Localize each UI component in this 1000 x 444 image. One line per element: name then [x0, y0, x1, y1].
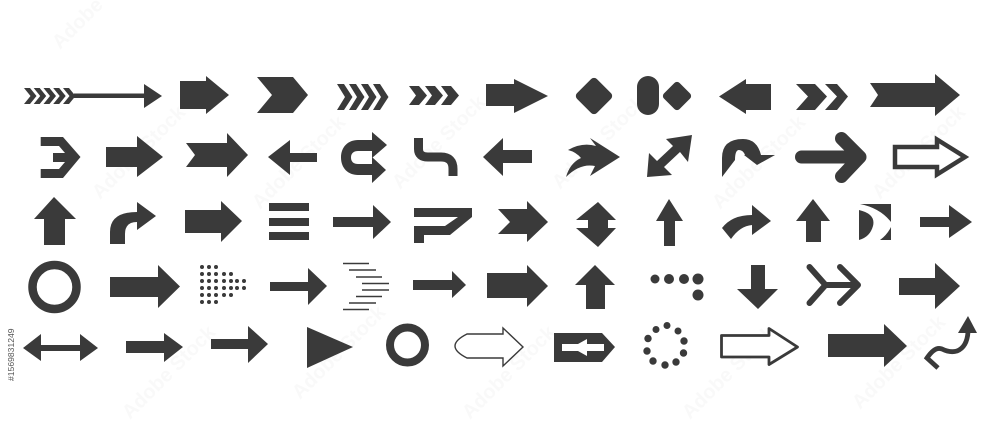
row 3: notched arrow — [498, 201, 548, 242]
row 3: right arrow — [920, 205, 972, 238]
watermark text: Adobe Stock — [248, 111, 351, 214]
row 4: down arrow — [737, 265, 778, 309]
row 3: up arrow — [796, 199, 830, 242]
row 4: up arrow — [575, 265, 615, 309]
row 2: notched arrow — [186, 133, 248, 177]
row 2: rounded arrow — [802, 138, 860, 176]
row 1: long notched arrow — [870, 74, 960, 116]
row 3: up arrow — [656, 199, 683, 246]
row 1: block arrow — [180, 76, 229, 114]
row 2: left arrow — [483, 138, 532, 176]
row 1: four chevrons — [337, 84, 388, 110]
row 3: up arrow — [34, 197, 76, 245]
row 3: curved arrow — [722, 205, 771, 239]
watermark text: Adobe Stock — [88, 101, 191, 204]
watermark text: Adobe Stock — [118, 321, 221, 424]
row 4: thin arrow — [413, 271, 466, 298]
row 5: horizontal double arrow — [23, 334, 98, 361]
row 4: block arrow — [487, 265, 548, 307]
row 1: rounded diamond — [574, 76, 614, 116]
row 3: vertical double arrow — [576, 202, 616, 247]
row 2: block arrow — [106, 136, 163, 177]
row 1: pill — [637, 76, 659, 115]
row 3: square swoosh — [859, 204, 891, 240]
row 5: right arrow — [211, 326, 268, 363]
row 5: large block arrow — [828, 324, 907, 367]
row 2: E shaped arrow — [41, 137, 80, 178]
row 4: speed lines arrow — [343, 264, 389, 310]
row 3: thin right arrow — [333, 205, 391, 239]
row 4: block arrow — [110, 265, 180, 308]
watermark text: Adobe Stock — [288, 301, 391, 404]
watermark text: Adobe Stock — [868, 101, 971, 204]
row 1: pointed arrow — [486, 79, 548, 113]
row 1: small rounded diamond — [661, 80, 693, 112]
row 5: thin outline arrow — [455, 328, 523, 366]
row 4: right arrow — [270, 268, 327, 305]
row 4: dotted corner arrow — [650, 274, 704, 300]
row 1: three chevrons — [409, 86, 459, 105]
row 1: left arrow — [719, 79, 771, 114]
row 5: squiggle arrow — [927, 316, 977, 368]
row 3: P shaped arrow — [414, 208, 472, 243]
stock id text: #1569831249 — [6, 328, 16, 381]
row 3: block arrow — [185, 201, 242, 242]
row 5: right arrow — [126, 333, 183, 362]
row 5: triangle — [307, 327, 353, 368]
row 1: large chevron — [257, 77, 308, 113]
row 4: dotted arrow — [200, 265, 246, 304]
row 3: curved right arrow — [110, 202, 156, 244]
watermark text: Adobe Stock — [388, 91, 491, 194]
row 5: tag with inner arrow — [554, 333, 615, 362]
row 1: double chevron — [796, 84, 848, 110]
watermark text: Adobe Stock — [848, 311, 951, 414]
row 5: outline arrow — [722, 328, 798, 364]
row 2: U-turn double arrow — [341, 132, 387, 183]
watermark text: Adobe Stock — [458, 321, 561, 424]
row 4: double round chevron — [810, 267, 858, 303]
row 2: curved U arrow — [722, 139, 775, 177]
row 2: outline arrow — [895, 140, 965, 174]
row 2: left arrow — [268, 140, 317, 175]
row 2: diagonal double arrow — [647, 135, 692, 177]
row 4: block arrow — [899, 263, 960, 309]
row 2: S-bend line — [418, 138, 453, 176]
watermark text: Adobe Stock — [678, 321, 781, 424]
row 3: three bars — [269, 203, 309, 240]
watermark text: Adobe Stock — [548, 91, 651, 194]
row 4: ring — [32, 265, 76, 309]
row 2: feathered arrow — [566, 138, 620, 177]
row 5: ring — [390, 328, 425, 362]
row 5: dotted circle — [643, 322, 688, 369]
watermark text: Adobe Stock — [708, 111, 811, 214]
row 1: long fletched arrow — [24, 84, 162, 108]
